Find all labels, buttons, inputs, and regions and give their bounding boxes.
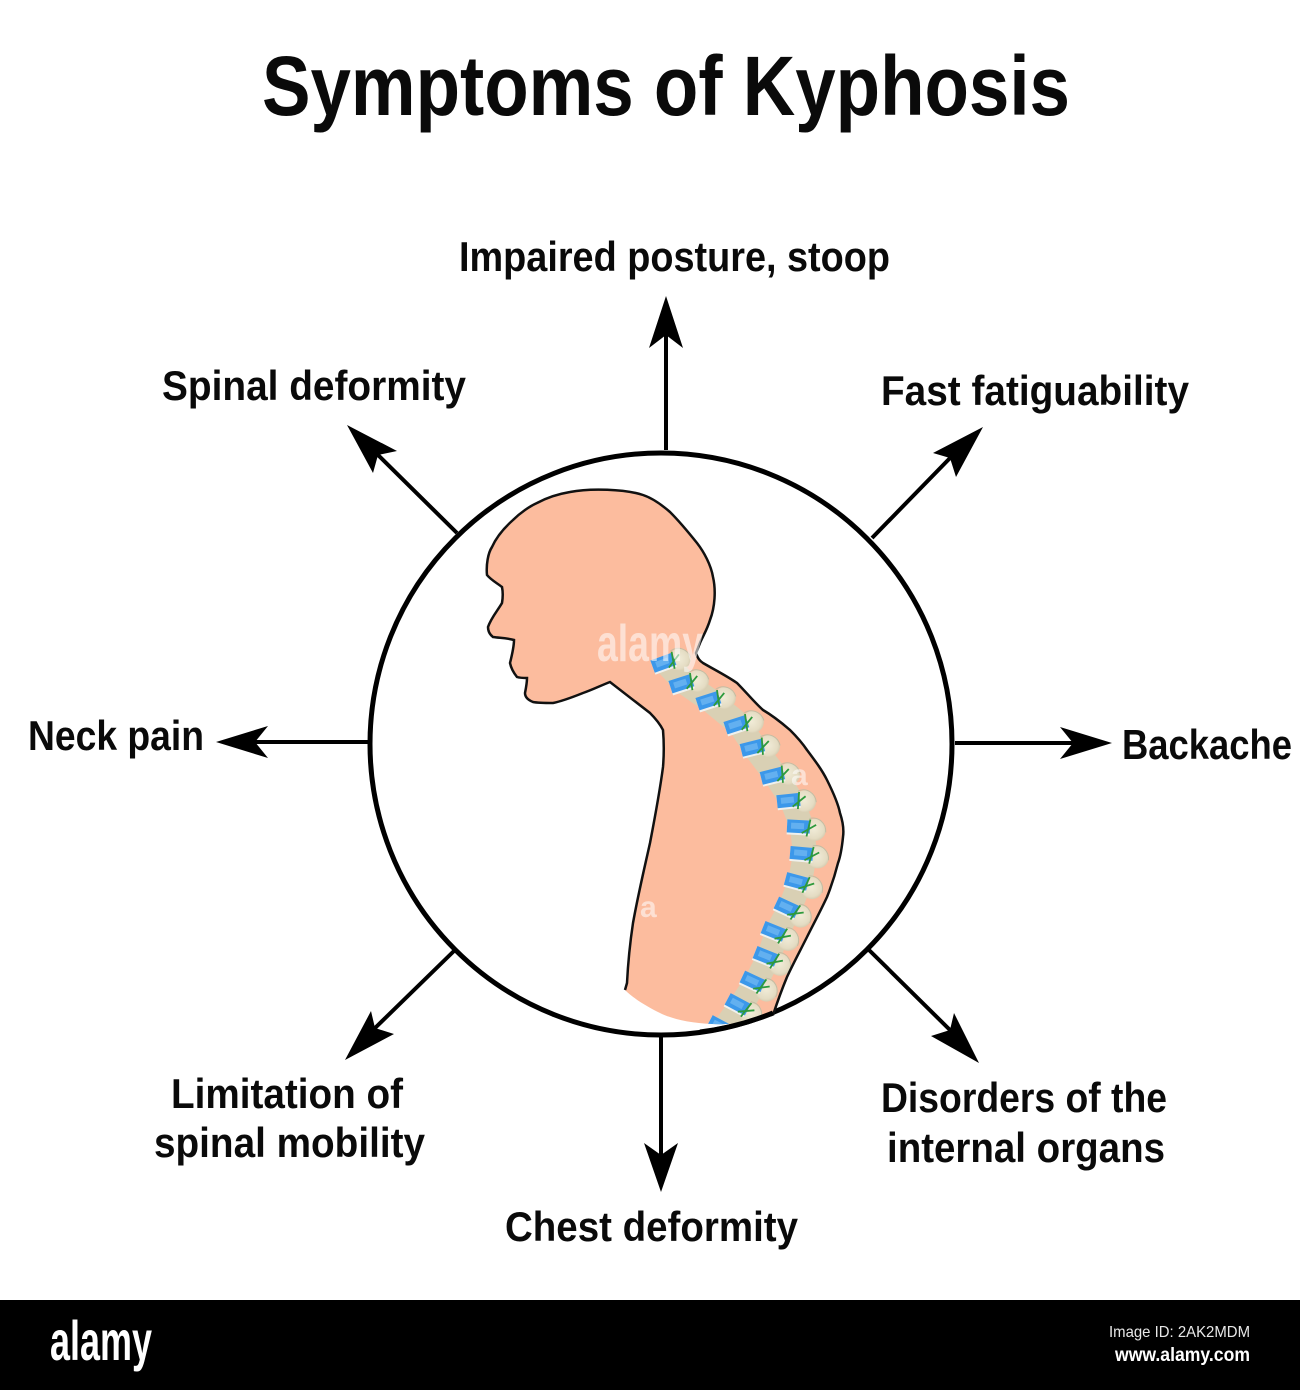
watermark: a	[791, 759, 808, 792]
arrow: upper right	[872, 427, 983, 538]
label: disorders of the internal organs: internal organs	[887, 1124, 1165, 1171]
label: limitation of spinal mobility: Limitation of	[171, 1070, 404, 1117]
label: neck pain: Neck pain	[28, 712, 204, 759]
arrow: down	[644, 1037, 678, 1192]
label: chest deformity: Chest deformity	[505, 1203, 799, 1250]
watermark	[597, 615, 808, 924]
label: fast fatiguability: Fast fatiguability	[881, 367, 1190, 414]
footer url: www.alamy.com	[1114, 1345, 1250, 1366]
footer logo: alamy	[50, 1309, 152, 1372]
arrow: lower right	[869, 950, 979, 1063]
label: disorders of the internal organs	[881, 1074, 1167, 1171]
label: limitation of spinal mobility: spinal mobility	[154, 1119, 426, 1166]
arrow: lower left	[345, 950, 455, 1060]
label: limitation of spinal mobility	[154, 1070, 426, 1166]
image id: Image ID: 2AK2MDM	[1109, 1324, 1250, 1341]
circle edge over figure	[700, 1013, 773, 1032]
central circle	[370, 453, 952, 1035]
title: Symptoms of Kyphosis	[262, 39, 1070, 133]
label: spinal deformity: Spinal deformity	[162, 362, 467, 409]
label: impaired posture: Impaired posture, stoop	[459, 233, 890, 280]
footer bar	[0, 1300, 1300, 1390]
body silhouette	[487, 490, 843, 1024]
body outline	[487, 490, 843, 1015]
watermark: a	[640, 891, 657, 924]
arrow: left	[216, 726, 369, 758]
arrow: right	[955, 727, 1112, 759]
spine	[649, 645, 830, 1051]
human figure with kyphosis	[487, 490, 843, 1051]
arrow: up	[649, 296, 683, 450]
label: disorders of the internal organs: Disorders of the	[881, 1074, 1167, 1121]
arrow: upper left	[347, 425, 457, 533]
watermark: alamy	[597, 615, 703, 673]
